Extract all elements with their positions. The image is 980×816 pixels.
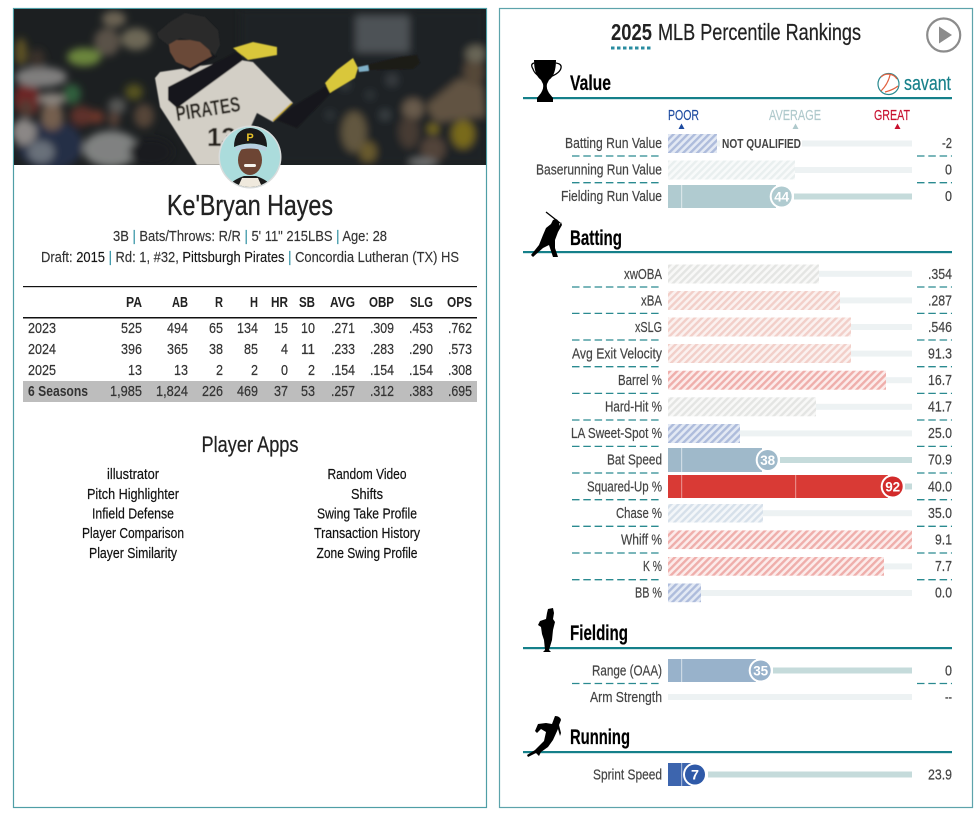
player apps right column xyxy=(314,466,420,562)
row: barrel %: Barrel % xyxy=(618,372,662,389)
row: bb % xyxy=(635,584,952,602)
heading: fielding: Fielding xyxy=(570,622,628,645)
row 2024: .283 xyxy=(370,341,394,358)
row 2024: 4 xyxy=(281,341,288,358)
scale legend: poor average great xyxy=(668,107,910,129)
row: k % xyxy=(643,557,952,576)
row 2024: .290 xyxy=(409,341,433,358)
row 2025: .154 xyxy=(331,362,355,379)
row career totals: 1,824 xyxy=(156,383,188,400)
row 2025: 2 xyxy=(308,362,315,379)
row: xBA xyxy=(641,291,952,310)
row: xwOBA: xwOBA xyxy=(624,266,662,283)
row career totals: .383 xyxy=(409,383,433,400)
row: hard-hit % xyxy=(605,397,952,416)
row: batting run value: -2 xyxy=(942,135,952,152)
row: range (OAA) xyxy=(592,658,952,682)
player apps right column: Shifts xyxy=(351,486,383,503)
player apps left column: Player Comparison xyxy=(82,525,184,542)
row: arm strength xyxy=(590,689,952,706)
row: k %: 7.7 xyxy=(935,558,952,575)
row 2024: 396 xyxy=(121,341,142,358)
row 2025: .308 xyxy=(448,362,472,379)
row: sprint speed: 7 xyxy=(691,766,699,782)
row: fielding run value: 44 xyxy=(774,188,789,204)
row 2024: 2024 xyxy=(28,341,56,358)
row: xSLG xyxy=(635,318,952,336)
row: bat speed: 70.9 xyxy=(928,452,952,468)
row: range (OAA): Range (OAA) xyxy=(592,662,662,680)
chart title xyxy=(611,19,861,48)
row: hard-hit %: Hard-Hit % xyxy=(605,398,662,416)
player apps left column: Pitch Highlighter xyxy=(87,486,179,503)
row 2025: 2025 xyxy=(28,362,56,379)
icon: runner silhouette xyxy=(527,716,561,757)
row: bb %: BB % xyxy=(635,584,662,602)
row: fielding run value xyxy=(561,184,952,208)
row: avg exit velocity: 91.3 xyxy=(928,346,952,362)
row: batting run value xyxy=(565,134,952,153)
row: bat speed xyxy=(607,448,952,472)
table header: HR xyxy=(271,294,288,311)
row career totals: 53 xyxy=(301,383,315,400)
scale legend: poor average great: GREAT xyxy=(874,107,910,124)
panel: player profile xyxy=(12,8,486,808)
row 2025: .154 xyxy=(409,362,433,379)
row: LA sweet-spot %: LA Sweet-Spot % xyxy=(571,425,662,442)
row career totals: .695 xyxy=(448,383,472,400)
row 2024 xyxy=(28,341,472,358)
row: squared-up %: 92 xyxy=(885,478,900,494)
row: xwOBA: .354 xyxy=(928,266,952,283)
row 2023: .453 xyxy=(409,320,433,337)
row: range (OAA): 35 xyxy=(753,662,768,678)
row 2025: .154 xyxy=(370,362,394,379)
player apps heading: Player Apps xyxy=(202,432,298,457)
row: chase % xyxy=(616,504,952,522)
row: batting run value: Batting Run Value xyxy=(565,135,662,152)
draft line: Draft: 2015 | Rd: 1, #32, Pittsburgh Pirates | Concordia Lutheran (TX) HS xyxy=(41,249,459,266)
row 2025: 2 xyxy=(251,362,258,379)
row 2023: 494 xyxy=(167,320,188,337)
row: xwOBA xyxy=(624,264,952,284)
player bio line: 3B | Bats/Throws: R/R | 5' 11" 215LBS | Age: 28 xyxy=(113,228,387,245)
row career totals: .312 xyxy=(370,383,394,400)
row 2025: 13 xyxy=(174,362,188,379)
section: fielding xyxy=(523,608,952,652)
icon: batter silhouette xyxy=(531,212,562,257)
row 2024: 85 xyxy=(244,341,258,358)
chart title: MLB Percentile Rankings xyxy=(658,19,861,45)
row 2023: .271 xyxy=(331,320,355,337)
row 2025: 2 xyxy=(216,362,223,379)
row career totals: 226 xyxy=(202,383,223,400)
row 2023 xyxy=(28,320,472,337)
row: batting run value: NOT QUALIFIED xyxy=(722,136,801,151)
player figure: 13 xyxy=(207,122,236,152)
row: range (OAA): 0 xyxy=(945,662,952,680)
player headshot avatar xyxy=(218,126,282,188)
row 2023: 10 xyxy=(301,320,315,337)
row 2025 xyxy=(28,362,472,379)
row: avg exit velocity xyxy=(572,344,952,363)
chart title: 2025 xyxy=(611,19,652,45)
row: hard-hit %: 41.7 xyxy=(928,398,952,416)
row: baserunning run value xyxy=(536,160,952,180)
heading: value: Value xyxy=(570,72,611,95)
row: squared-up %: 40.0 xyxy=(928,478,952,496)
row 2025: 13 xyxy=(128,362,142,379)
row: LA sweet-spot % xyxy=(571,424,952,443)
table header: AB xyxy=(172,294,188,311)
table header: SB xyxy=(299,294,315,311)
row: fielding run value: 0 xyxy=(945,188,952,205)
row: barrel % xyxy=(618,371,952,390)
row: xSLG: .546 xyxy=(928,319,952,336)
player apps left column: Infield Defense xyxy=(92,506,174,522)
row: whiff %: Whiff % xyxy=(621,532,662,548)
player apps right column: Swing Take Profile xyxy=(317,506,417,522)
player headshot avatar: P xyxy=(246,132,254,144)
section: running xyxy=(523,716,952,757)
table header: PA xyxy=(126,294,142,311)
scale legend: poor average great: AVERAGE xyxy=(769,107,821,124)
player apps left column: Player Similarity xyxy=(89,545,177,562)
icon: trophy xyxy=(532,60,561,102)
row: sprint speed xyxy=(593,762,952,786)
career stats table xyxy=(23,286,477,402)
row 2023: .309 xyxy=(370,320,394,337)
row 2024: 365 xyxy=(167,341,188,358)
icon: fielder silhouette xyxy=(538,608,555,652)
player apps right column: Transaction History xyxy=(314,525,420,542)
row: arm strength: -- xyxy=(945,689,952,706)
row: bat speed: 38 xyxy=(760,452,775,468)
player apps left column xyxy=(82,466,184,562)
row: xBA: xBA xyxy=(641,292,662,310)
logo: savant xyxy=(878,73,951,95)
player figure: PIRATES xyxy=(174,93,242,126)
table header: SLG xyxy=(410,294,433,311)
row: xSLG: xSLG xyxy=(635,319,662,336)
row career totals: 1,985 xyxy=(110,383,142,400)
row career totals: 37 xyxy=(274,383,288,400)
section: batting xyxy=(523,212,952,257)
player apps left column: illustrator xyxy=(107,466,159,483)
row: sprint speed: Sprint Speed xyxy=(593,766,662,784)
player name: Ke'Bryan Hayes xyxy=(167,190,333,222)
row career totals: .257 xyxy=(331,383,355,400)
row: k %: K % xyxy=(643,558,662,575)
row career totals xyxy=(28,383,472,400)
row 2024: .233 xyxy=(331,341,355,358)
row 2023: 2023 xyxy=(28,320,56,337)
row 2023: .762 xyxy=(448,320,472,337)
row: bat speed: Bat Speed xyxy=(607,452,662,468)
row career totals: 469 xyxy=(237,383,258,400)
row 2023: 65 xyxy=(209,320,223,337)
row: squared-up % xyxy=(587,474,952,498)
table header xyxy=(126,294,472,311)
table header: AVG xyxy=(330,294,355,311)
row: xBA: .287 xyxy=(928,292,952,310)
table header: OPS xyxy=(447,294,472,311)
row: arm strength: Arm Strength xyxy=(590,689,662,706)
player apps right column: Random Video xyxy=(328,466,406,483)
row: chase %: Chase % xyxy=(616,505,662,522)
row 2024: 11 xyxy=(301,341,315,358)
row career totals: 6 Seasons xyxy=(28,383,88,400)
row 2023: 525 xyxy=(121,320,142,337)
row: baserunning run value: Baserunning Run Value xyxy=(536,162,662,178)
row: whiff % xyxy=(621,530,952,549)
table header: OBP xyxy=(369,294,394,311)
heading: running: Running xyxy=(570,726,630,749)
row: bb %: 0.0 xyxy=(935,584,952,602)
table header: R xyxy=(215,294,223,311)
logo: savant: savant xyxy=(904,73,951,95)
row 2023: 15 xyxy=(274,320,288,337)
row: barrel %: 16.7 xyxy=(928,372,952,389)
row 2025: 0 xyxy=(281,362,288,379)
row 2024: 38 xyxy=(209,341,223,358)
heading: batting: Batting xyxy=(570,227,622,250)
icon: play button xyxy=(927,18,960,52)
row: squared-up %: Squared-Up % xyxy=(587,478,662,496)
player figure xyxy=(155,13,420,165)
panel: percentile rankings xyxy=(500,8,972,808)
section: value xyxy=(523,60,952,102)
row 2024: .573 xyxy=(448,341,472,358)
row: whiff %: 9.1 xyxy=(935,532,952,548)
row: avg exit velocity: Avg Exit Velocity xyxy=(572,346,662,362)
player apps right column: Zone Swing Profile xyxy=(316,545,418,562)
row: chase %: 35.0 xyxy=(928,505,952,522)
hero photo xyxy=(12,9,486,170)
scale legend: poor average great: POOR xyxy=(668,107,699,124)
row: baserunning run value: 0 xyxy=(945,162,952,178)
row 2023: 134 xyxy=(237,320,258,337)
row: LA sweet-spot %: 25.0 xyxy=(928,425,952,442)
table header: H xyxy=(250,294,258,311)
row dividers xyxy=(572,156,952,684)
row: fielding run value: Fielding Run Value xyxy=(561,188,662,205)
row: sprint speed: 23.9 xyxy=(928,766,952,784)
